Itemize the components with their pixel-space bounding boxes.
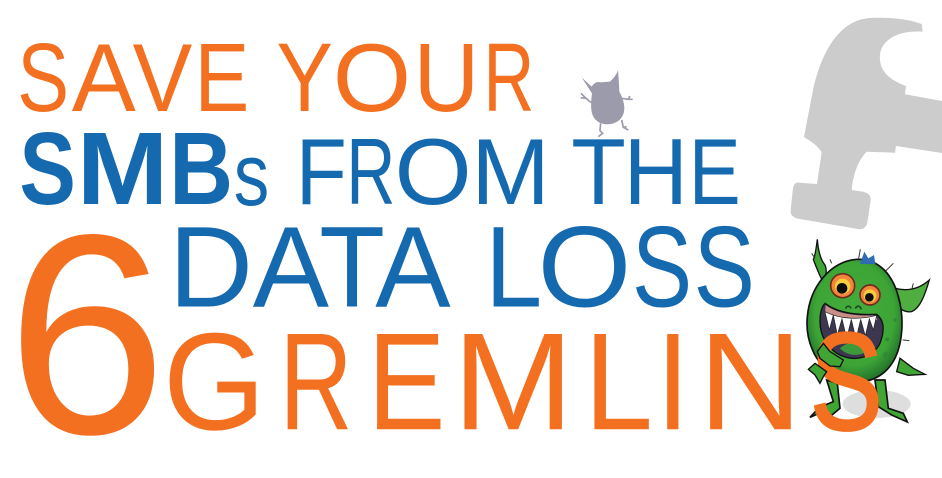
gremlin shadow: [843, 390, 911, 418]
heading line: SMBs FROM THE: E: [689, 120, 741, 225]
heading line: GREMLINS: N: [698, 304, 803, 459]
gremlin gums: [825, 305, 877, 320]
gremlin tongue: [840, 343, 869, 355]
gremlin body: [807, 259, 902, 382]
heading line: GREMLINS: M: [452, 305, 574, 460]
heading line: SAVE YOUR: R: [483, 23, 534, 132]
gremlin blue tuft: [860, 252, 875, 264]
heading line: SAVE YOUR: [17, 23, 534, 133]
heading line: SAVE YOUR: O: [333, 23, 411, 132]
gremlin left ear: [813, 239, 826, 282]
heading line: GREMLINS: L: [584, 304, 653, 459]
heading line: DATA LOSS: L: [485, 203, 542, 332]
gremlin hairs: [812, 249, 913, 341]
gremlin mouth: [820, 303, 883, 358]
gremlin spots: [883, 318, 897, 358]
heading line: DATA LOSS: [169, 202, 755, 332]
heading line: SAVE YOUR: Y: [276, 25, 333, 132]
heading line: SMBs FROM THE: B: [169, 112, 233, 227]
heading line: SAVE YOUR: V: [133, 24, 192, 132]
heading line: SMBs FROM THE: T: [571, 120, 626, 224]
heading line: SAVE YOUR: E: [194, 25, 249, 133]
heading line: GREMLINS: R: [279, 304, 353, 459]
gremlin right eye: [860, 285, 880, 305]
gremlin teeth: [825, 312, 877, 339]
heading line: SMBs FROM THE: [19, 111, 741, 227]
heading line: SMBs FROM THE: O: [394, 119, 472, 224]
heading line: SAVE YOUR: S: [17, 23, 69, 132]
gremlin right ear: [895, 280, 929, 312]
heading line: SMBs FROM THE: F: [296, 118, 347, 224]
icon: small grey gremlin: [581, 70, 633, 137]
heading line: DATA LOSS: D: [169, 202, 253, 332]
heading line: GREMLINS: [163, 304, 883, 460]
gremlin left eye: [831, 274, 855, 298]
gremlin legs and feet: [810, 380, 907, 422]
icon: green gremlin: [807, 239, 929, 422]
icon: grey hammer: [791, 18, 942, 229]
heading line: SMBs FROM THE: s: [234, 126, 269, 224]
heading line: SMBs FROM THE: M: [77, 111, 168, 226]
gremlin side spike: [897, 358, 925, 375]
heading line: DATA LOSS: A: [253, 203, 330, 332]
heading line: SAVE YOUR: U: [414, 23, 479, 132]
heading line: SMBs FROM THE: R: [346, 120, 395, 225]
heading line: GREMLINS: S: [810, 305, 883, 459]
gremlin hand over the S: [808, 343, 843, 383]
heading line: SMBs FROM THE: S: [19, 111, 76, 226]
heading line: GREMLINS: E: [368, 305, 445, 460]
heading line: DATA LOSS: S: [632, 203, 692, 331]
gremlin nostrils: [846, 306, 861, 309]
heading line: GREMLINS: G: [163, 304, 266, 459]
heading line: SMBs FROM THE: H: [624, 120, 688, 225]
heading line: SAVE YOUR: A: [72, 25, 136, 132]
heading line: SMBs FROM THE: M: [471, 119, 550, 224]
heading line: DATA LOSS: T: [319, 202, 385, 331]
heading line: DATA LOSS: O: [538, 202, 631, 331]
heading line: GREMLINS: I: [656, 305, 690, 459]
heading line: DATA LOSS: A: [375, 204, 451, 332]
heading line: DATA LOSS: S: [694, 204, 755, 332]
